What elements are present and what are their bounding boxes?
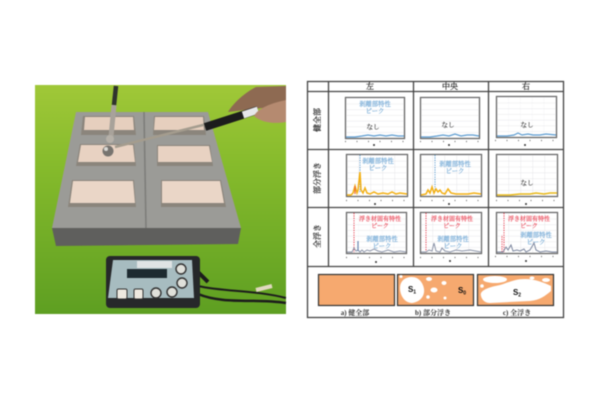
device label <box>137 261 172 268</box>
row heading: partial delamination: 部分浮き <box>312 162 322 194</box>
caption a: a) 健全部 <box>341 308 369 317</box>
diagram c: full delamination <box>478 274 554 317</box>
diagram b: partial delamination <box>398 274 474 317</box>
chart annotation: none: なし <box>520 179 534 187</box>
chart: sound, right <box>495 96 557 146</box>
vertical tapping rod <box>106 86 116 143</box>
table grid <box>307 81 564 318</box>
hand holding hammer, back fingers <box>228 86 286 112</box>
chart annotation: none: なし <box>366 123 380 131</box>
caption b: b) 部分浮き <box>415 308 451 317</box>
chart annotation: material peak: ピーク <box>371 223 389 230</box>
row heading: full delamination: 全浮き <box>312 224 322 248</box>
label S0: S <box>458 286 463 295</box>
chart annotation: delamination peak: ピーク <box>373 242 391 250</box>
delamination blobs b <box>400 275 446 303</box>
tile top left <box>81 116 136 135</box>
chart annotation: delamination peak: ピーク <box>444 242 462 250</box>
tile bottom left <box>68 180 136 207</box>
chart: full, center <box>420 212 482 262</box>
chart annotation: material peak: ピーク <box>443 223 461 230</box>
photo: hammering test on tile specimen <box>35 85 286 314</box>
chart annotation: ピーク <box>369 164 387 172</box>
chart annotation: 剥離部特性 <box>362 158 394 165</box>
hammer rod with ball head <box>102 110 258 156</box>
chart: full, right <box>495 212 558 262</box>
device face plate <box>108 260 194 298</box>
label S2: 2 <box>518 292 521 298</box>
tile bottom right <box>161 180 226 207</box>
chart annotation: material peak: ピーク <box>520 223 538 230</box>
chart annotation: 剥離部特性 <box>439 161 471 168</box>
chart annotation: ピーク <box>366 107 384 115</box>
tile middle right <box>157 145 213 166</box>
chart annotation: none: なし <box>442 121 454 129</box>
label S2: S <box>513 288 518 297</box>
chart annotation: delamination peak: 剥離部特性 <box>366 236 398 243</box>
concrete block <box>52 112 241 246</box>
device cables <box>196 270 286 303</box>
label S1: S <box>408 285 413 294</box>
chart annotation: delamination peak: 剥離部特性 <box>437 236 469 243</box>
delamination blobs c <box>480 276 551 303</box>
caption c: c) 全浮き <box>503 308 531 317</box>
column heading: center: 中央 <box>442 81 458 91</box>
grass background <box>35 85 286 314</box>
chart annotation: none: なし <box>520 121 534 129</box>
chart: partial, left <box>346 154 408 205</box>
chart annotation: delamination peak: 剥離部特性 <box>520 232 552 239</box>
chart: sound, center <box>420 98 480 146</box>
label S1: 1 <box>413 290 416 296</box>
diagram a: sound part <box>318 274 394 317</box>
chart annotation: material peak: 浮き材固有特性 <box>359 217 401 223</box>
device buttons <box>117 264 187 299</box>
hand holding hammer, front fingers <box>254 100 286 123</box>
chart: partial, center <box>420 154 482 205</box>
device display <box>127 269 167 278</box>
device body <box>106 256 200 308</box>
chart annotation: material peak: 浮き材固有特性 <box>508 217 550 223</box>
column heading: right: 右 <box>522 81 530 91</box>
table of frequency spectra <box>307 81 564 318</box>
chart annotation: ピーク <box>446 167 464 175</box>
chart: full, left <box>346 212 407 263</box>
measuring device <box>106 256 286 308</box>
tile top right <box>153 116 206 135</box>
chart annotation: 剥離部特性 <box>359 101 391 108</box>
chart annotation: material peak: 浮き材固有特性 <box>431 217 473 223</box>
tile middle left <box>76 144 136 166</box>
chart: partial, right <box>496 154 558 205</box>
column heading: left: 左 <box>366 81 374 91</box>
chart: sound, left <box>345 98 405 146</box>
chart annotation: delamination peak: ピーク <box>527 238 545 246</box>
label S0: 0 <box>463 290 466 296</box>
row heading: sound part: 健全部 <box>312 108 322 132</box>
